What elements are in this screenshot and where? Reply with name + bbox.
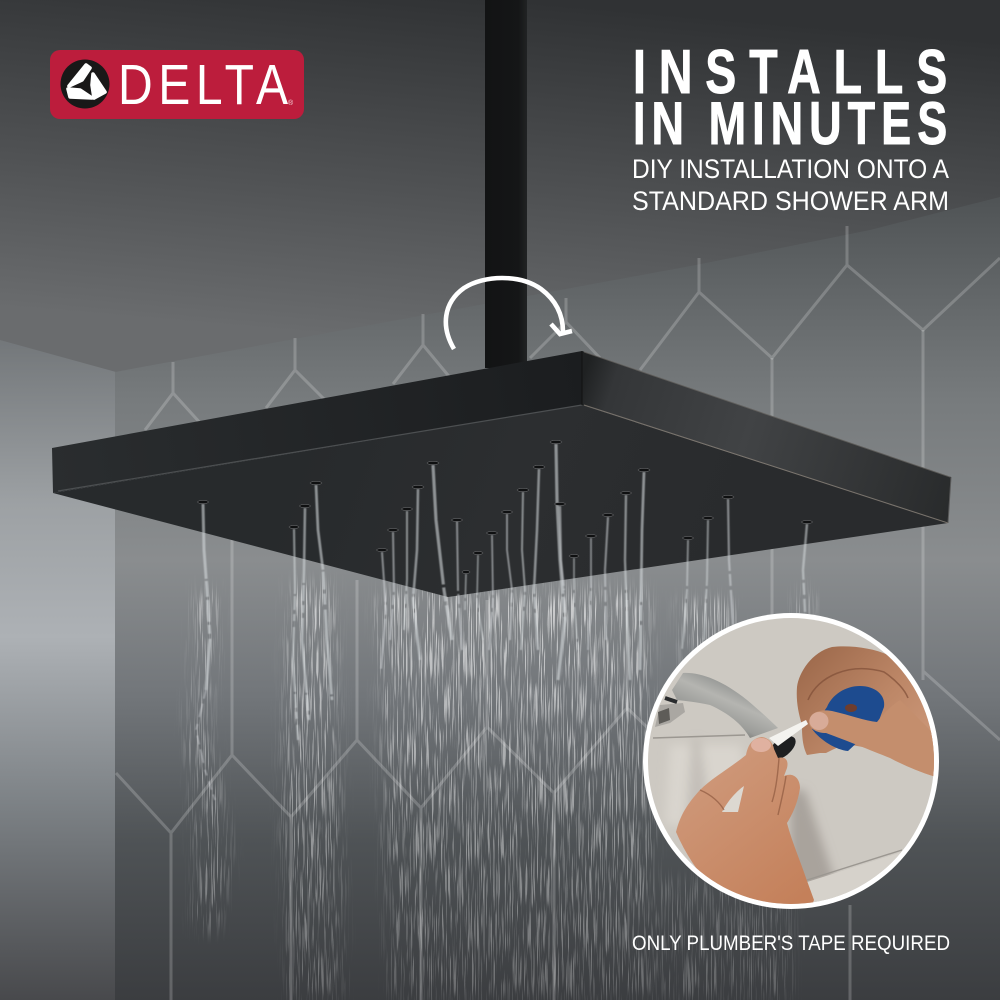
logo emblem xyxy=(60,60,110,108)
head underside xyxy=(53,405,948,597)
wordmark: DELTA xyxy=(118,54,288,117)
upper jets xyxy=(196,444,807,800)
subheading: STANDARD SHOWER ARM xyxy=(632,186,949,216)
tape strip xyxy=(769,720,808,746)
left hand xyxy=(676,737,814,915)
left hand finger creases xyxy=(700,758,786,815)
heading xyxy=(633,36,947,158)
aerator xyxy=(772,736,796,758)
right thumb xyxy=(809,710,934,776)
right hand finger crease xyxy=(808,669,908,700)
pipe flange xyxy=(655,703,685,727)
rotation arrow xyxy=(446,278,572,349)
subheading xyxy=(632,154,949,216)
left thumbnail xyxy=(751,738,771,752)
photo contents xyxy=(648,618,934,904)
right hand xyxy=(797,646,936,777)
tile grout pattern xyxy=(116,226,1000,1000)
fine water streaks xyxy=(180,576,819,1000)
head right face xyxy=(582,351,951,523)
shower nozzles xyxy=(198,440,812,574)
shower head xyxy=(52,351,951,597)
head edge highlights xyxy=(58,351,951,523)
Delta logo badge xyxy=(50,50,304,119)
caption: ONLY PLUMBER'S TAPE REQUIRED xyxy=(632,931,950,955)
right thumbnail xyxy=(810,712,828,730)
white ring xyxy=(643,613,939,909)
heading: INSTALLS xyxy=(633,36,947,107)
heading: IN MINUTES xyxy=(633,91,947,158)
subheading: DIY INSTALLATION ONTO A xyxy=(632,154,949,184)
back wall xyxy=(115,197,1000,1000)
falling water jets xyxy=(196,440,812,800)
head front-left face xyxy=(52,351,582,493)
ceiling xyxy=(0,0,1000,380)
shower arm xyxy=(485,0,527,368)
circular inset photo: applying plumber's tape xyxy=(640,610,945,915)
registered mark: ® xyxy=(288,99,294,107)
shower arm pipe xyxy=(672,673,778,738)
blue tape roll xyxy=(812,686,884,751)
left finger gap xyxy=(722,786,744,812)
roll hole xyxy=(845,704,857,712)
left wall xyxy=(0,340,116,1000)
